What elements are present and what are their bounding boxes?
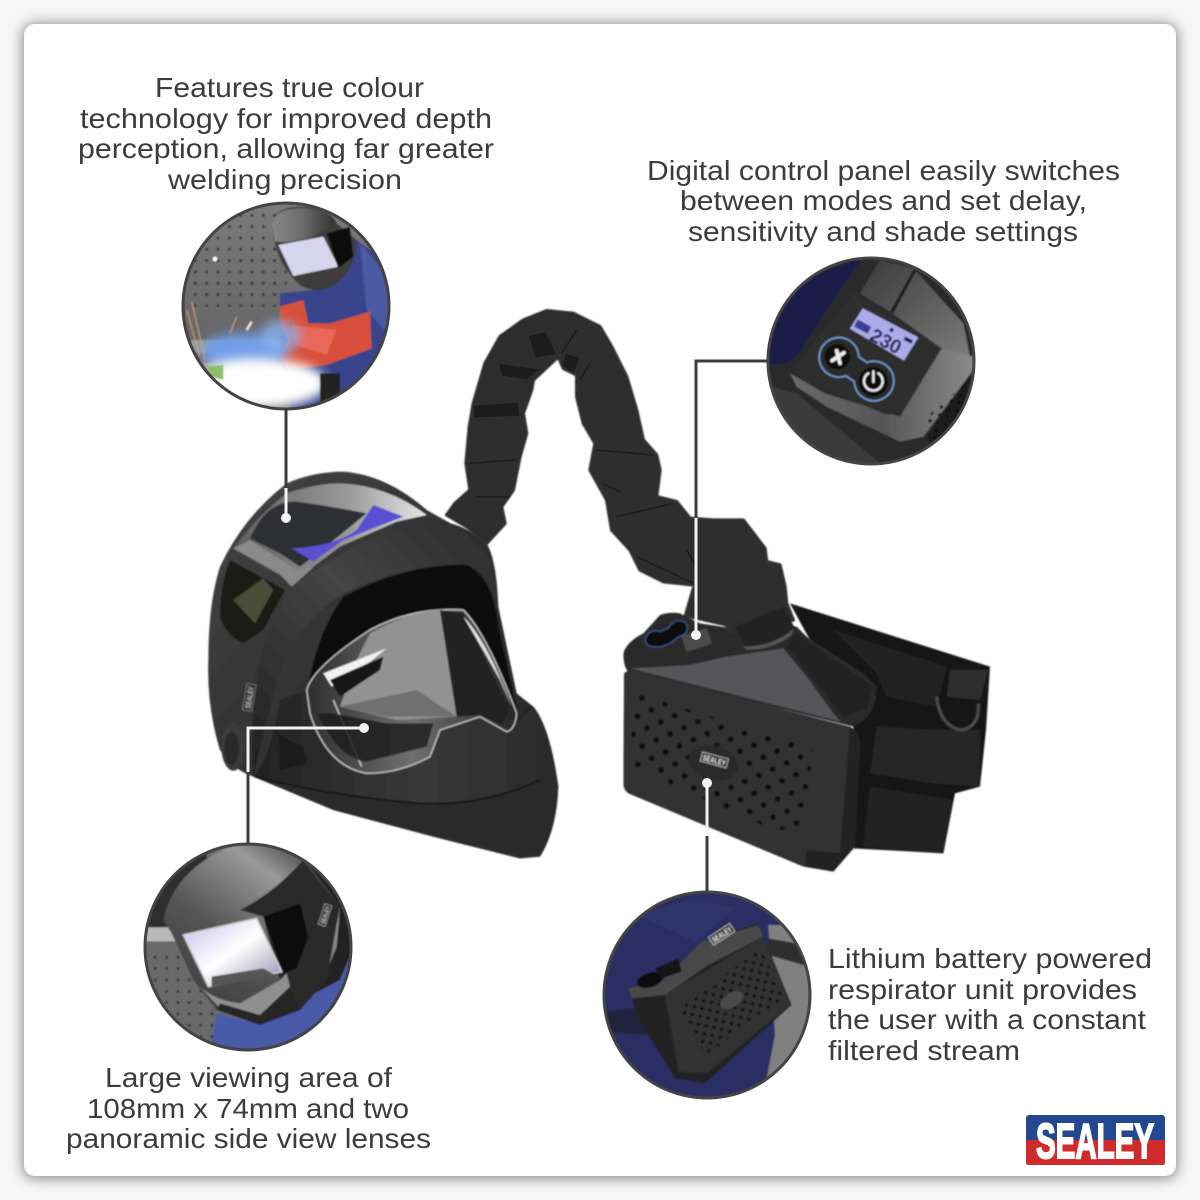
blue cloth <box>767 257 863 365</box>
callout line: control panel <box>691 361 768 640</box>
red gloves <box>278 300 372 370</box>
LCD display <box>850 308 918 361</box>
circle photo: viewing area <box>146 846 350 1048</box>
side lens <box>263 903 308 973</box>
circle outline: control panel <box>768 258 974 464</box>
helmet shell <box>208 472 558 858</box>
buttons <box>818 337 895 402</box>
controls <box>636 971 663 988</box>
clear face shield <box>307 610 517 773</box>
SEALEY mark on helmet: SEALEY <box>243 686 256 709</box>
circle outline: battery unit <box>604 892 810 1098</box>
circle photo: control panel <box>770 260 972 462</box>
text: viewing area feature: Large viewing area of <box>105 1062 392 1093</box>
text: lithium battery feature: respirator unit provides <box>828 974 1137 1005</box>
text: viewing area feature: 108mm x 74mm and two <box>87 1093 409 1124</box>
hose collar <box>683 573 757 633</box>
welding arc sparks <box>200 333 287 370</box>
heading: true colour feature text: Features true colour <box>155 72 424 103</box>
callout line: colour technology <box>281 409 291 523</box>
LCD display: 230 <box>866 325 905 359</box>
control plate <box>870 407 892 415</box>
text: lithium battery feature: Lithium battery powered <box>828 943 1152 974</box>
visor band <box>252 518 497 777</box>
SEALEY badge: SEALEY <box>710 925 734 945</box>
helmet <box>208 472 558 858</box>
SEALEY badge on unit <box>700 752 728 768</box>
device body <box>628 923 792 1083</box>
SEALEY badge on unit: SEALEY <box>702 753 727 768</box>
heading: digital control panel text: sensitivity and shade settings <box>688 216 1078 247</box>
jacket <box>212 956 349 1048</box>
text: lithium battery feature <box>828 943 1152 1066</box>
callout line: viewing area <box>248 723 369 844</box>
SEALEY mark: SEALEY <box>321 906 332 925</box>
respirator battery unit <box>623 573 877 872</box>
unit top housing <box>623 613 877 727</box>
heading: digital control panel text <box>647 155 1120 247</box>
mask shell <box>163 845 340 1025</box>
heading: digital control panel text: Digital control panel easily switches <box>647 155 1120 186</box>
chin guard <box>253 690 558 858</box>
side lens <box>220 560 285 643</box>
small control buttons <box>645 621 712 652</box>
heading: true colour feature text: welding precision <box>167 164 402 195</box>
heading: true colour feature text: perception, allowing far greater <box>78 133 494 164</box>
text: viewing area feature: panoramic side view lenses <box>66 1123 431 1154</box>
circle outline: viewing area <box>145 844 351 1050</box>
lower housing <box>790 348 973 442</box>
SEALEY badge <box>709 924 735 945</box>
headband knob <box>221 723 245 771</box>
welding mask <box>272 207 357 290</box>
hose strap on unit <box>735 607 795 650</box>
inner opening <box>308 565 518 717</box>
heading: digital control panel text: between modes and set delay, <box>680 185 1087 216</box>
circle photo: welder at work <box>184 204 388 408</box>
top glass with blue lens <box>233 483 427 587</box>
viewing lens <box>183 918 282 987</box>
SEALEY mark <box>318 904 332 926</box>
text: viewing area feature <box>66 1062 431 1154</box>
flexible air hose <box>447 311 793 633</box>
jacket <box>280 240 384 408</box>
upper housing <box>860 260 970 357</box>
unit front face <box>623 670 860 872</box>
callout line: battery <box>702 778 712 892</box>
heading: true colour feature text: technology for improved depth <box>80 103 492 134</box>
circle photo: battery unit worn on belt <box>606 894 808 1096</box>
heading: true colour feature text <box>78 72 494 195</box>
belt behind battery unit <box>790 603 990 853</box>
text: lithium battery feature: the user with a constant <box>828 1004 1146 1035</box>
text: lithium battery feature: filtered stream <box>828 1035 1020 1066</box>
circle outline: welder <box>183 203 389 409</box>
